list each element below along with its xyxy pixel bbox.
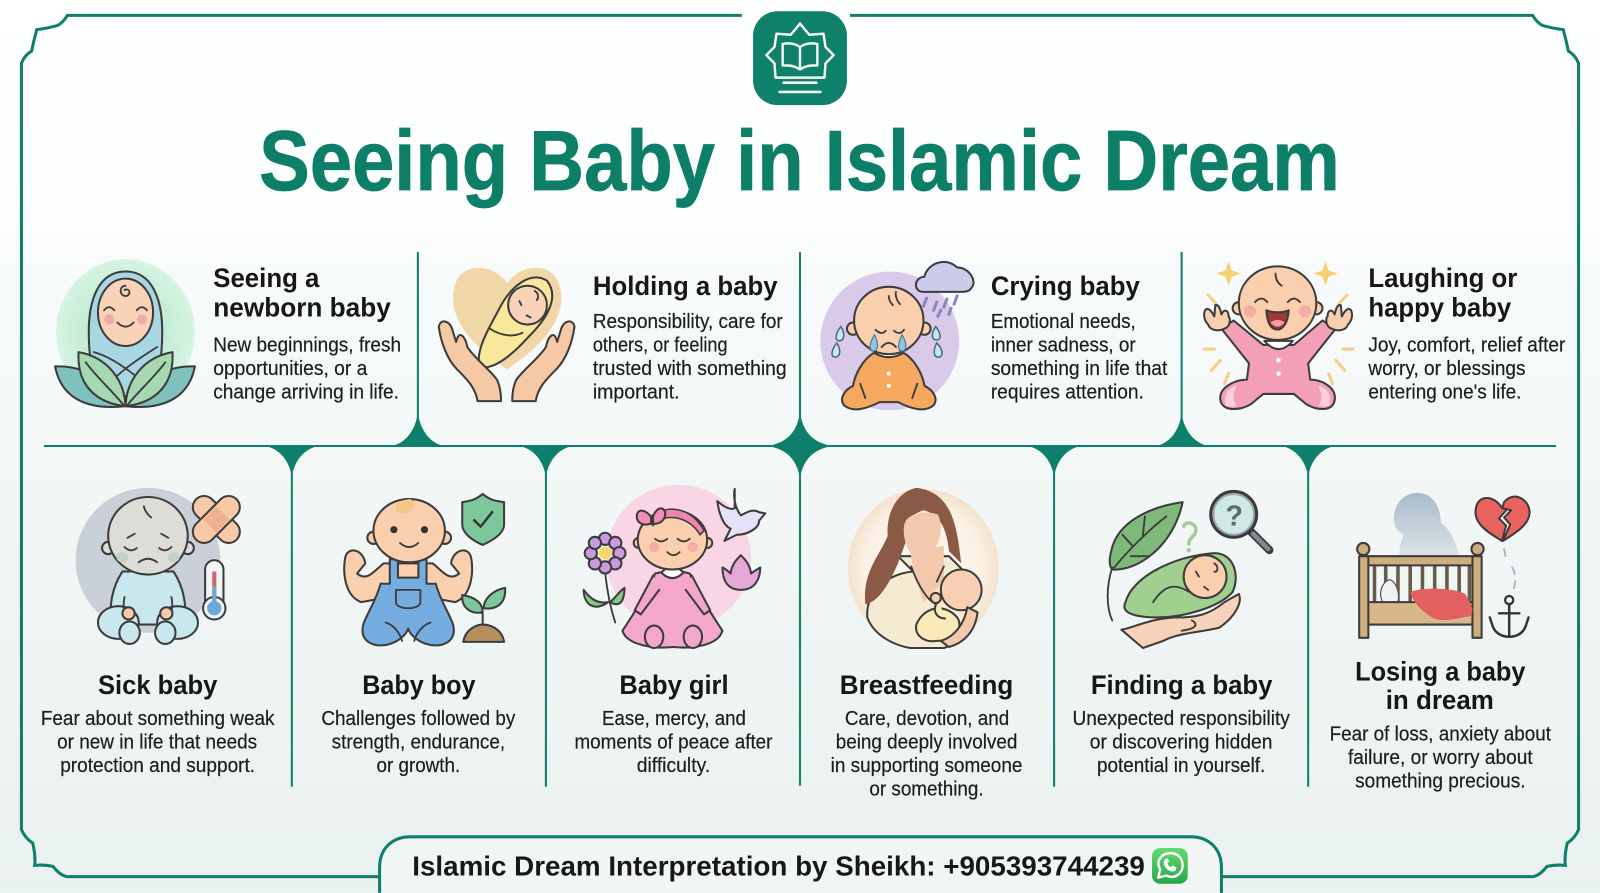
heading: Baby girl [619, 670, 729, 700]
description [574, 708, 773, 777]
icon: sick baby with bandage and thermometer [76, 479, 257, 644]
description: difficulty. [637, 755, 710, 777]
description: moments of peace after [574, 732, 773, 754]
icon: empty crib, silhouette, broken heart, anchor [1357, 493, 1530, 638]
description: worry, or blessings [1367, 358, 1526, 380]
description: Responsibility, care for [593, 311, 783, 333]
description: or new in life that needs [57, 732, 257, 754]
heading: Seeing a [213, 263, 320, 293]
description: in supporting someone [831, 755, 1022, 777]
description: or growth. [377, 755, 460, 777]
heading: Breastfeeding [840, 670, 1013, 700]
description [321, 708, 516, 777]
heading: newborn baby [213, 292, 391, 322]
description: something precious. [1355, 770, 1526, 792]
description: protection and support. [60, 755, 255, 777]
footer contact tab [380, 837, 1221, 893]
description: New beginnings, fresh [213, 335, 401, 357]
heading: Laughing or [1368, 263, 1517, 293]
description: Challenges followed by [321, 708, 516, 730]
description: entering one's life. [1368, 382, 1521, 404]
heading: Holding a baby [593, 271, 778, 301]
icon: swaddled newborn on lotus [55, 259, 195, 407]
icon: hand with swaddled baby, leaf and magnifier: ? [1226, 501, 1243, 533]
heading: in dream [1386, 685, 1494, 715]
description [1330, 723, 1551, 792]
heading: Crying baby [991, 271, 1140, 301]
heading [1355, 657, 1526, 715]
description: Unexpected responsibility [1072, 708, 1291, 730]
description [593, 311, 787, 404]
panel: losing a baby in dream [1330, 493, 1551, 792]
description: being deeply involved [836, 732, 1017, 754]
description: important. [593, 382, 680, 404]
heading [213, 263, 391, 322]
logo badge [753, 11, 847, 105]
panel: seeing a newborn baby [55, 259, 401, 407]
heading: Baby boy [362, 670, 476, 700]
icon: hands holding baby [439, 268, 574, 401]
icon: hand with swaddled baby, leaf and magnifier [1108, 492, 1269, 648]
description: inner sadness, or [991, 335, 1136, 357]
heading [1368, 263, 1517, 322]
contact text: Islamic Dream Interpretation by Sheikh: +905393744239 [412, 851, 1145, 882]
description: Fear about something weak [41, 708, 275, 730]
heading: Finding a baby [1091, 670, 1273, 700]
panel: sick baby [41, 479, 275, 777]
description: something in life that [991, 358, 1168, 380]
panel: holding a baby [439, 268, 787, 404]
heading: Sick baby [98, 670, 218, 700]
panel: breastfeeding [831, 488, 1022, 800]
icon: mother breastfeeding baby [848, 488, 999, 648]
description [1367, 335, 1565, 404]
description: or something. [869, 778, 984, 800]
description: potential in yourself. [1097, 755, 1265, 777]
panel: laughing or happy baby [1204, 261, 1565, 409]
description: strength, endurance, [332, 732, 505, 754]
heading: happy baby [1368, 292, 1511, 322]
description [831, 708, 1022, 800]
icon: baby girl with flower, dove and lotus [584, 485, 765, 648]
description: Joy, comfort, relief after [1368, 335, 1565, 357]
description: Emotional needs, [991, 311, 1136, 333]
description: opportunities, or a [213, 358, 368, 380]
description [213, 335, 401, 404]
description: Ease, mercy, and [602, 708, 746, 730]
icon: whatsapp [1152, 848, 1188, 884]
description: or discovering hidden [1090, 732, 1272, 754]
icon: crying baby with rain cloud [820, 262, 974, 410]
description [991, 311, 1168, 404]
description: change arriving in life. [213, 382, 399, 404]
panel: finding a baby [1072, 492, 1291, 777]
description: others, or feeling [593, 335, 728, 357]
title: Seeing Baby in Islamic Dream [259, 113, 1340, 209]
description: Fear of loss, anxiety about [1330, 723, 1551, 745]
panel: baby girl [574, 485, 773, 777]
heading: Losing a baby [1355, 657, 1526, 687]
panel: crying baby [820, 262, 1168, 410]
description: requires attention. [991, 382, 1144, 404]
grid dividers [44, 252, 1556, 787]
icon: happy baby with sparkles [1204, 261, 1353, 409]
icon: strong baby boy with shield and sprout [344, 494, 505, 645]
description: Care, devotion, and [845, 708, 1009, 730]
panel: baby boy [321, 494, 516, 777]
description: failure, or worry about [1348, 747, 1533, 769]
description [41, 708, 275, 777]
description [1072, 708, 1291, 777]
description: trusted with something [593, 358, 787, 380]
